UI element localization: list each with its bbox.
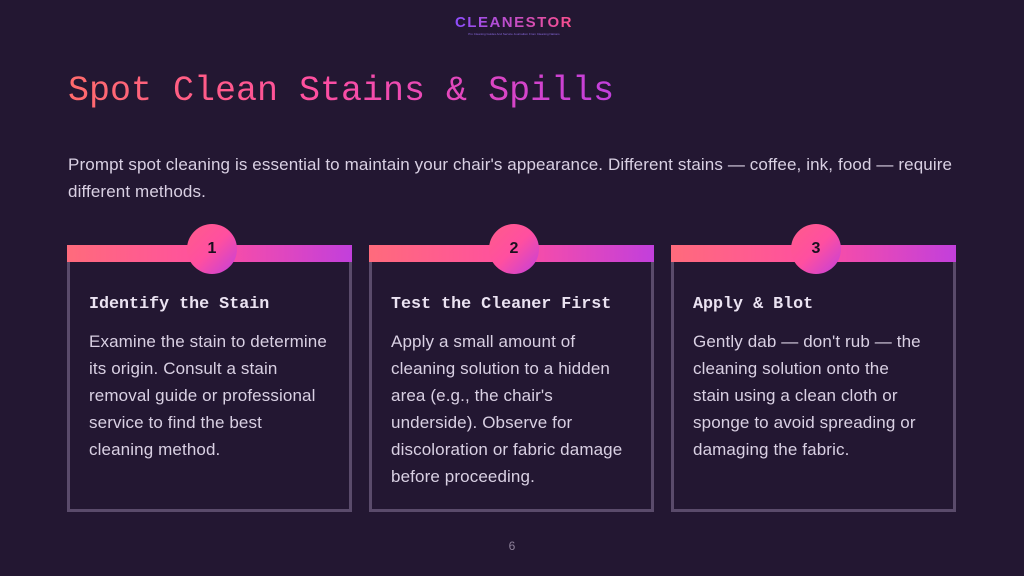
text 2: area (e.g., the chair's <box>391 386 553 405</box>
text 2: discoloration or fabric damage <box>391 440 622 459</box>
intro text <box>68 155 952 201</box>
text 1: removal guide or professional <box>89 386 316 405</box>
panel: step 3 <box>671 245 956 512</box>
text 1 <box>89 332 327 459</box>
badge 2: 2 <box>510 240 518 257</box>
title: Spot Clean Stains & Spills <box>68 71 614 111</box>
text 2: underside). Observe for <box>391 413 572 432</box>
text 3: damaging the fabric. <box>693 440 849 459</box>
text 3: cleaning solution onto the <box>693 359 889 378</box>
heading 1: Identify the Stain <box>89 295 269 314</box>
heading 2: Test the Cleaner First <box>391 295 611 314</box>
text 3: stain using a clean cloth or <box>693 386 898 405</box>
logo: CLEANESTOR <box>455 14 573 31</box>
text 2 <box>391 332 622 486</box>
badge 3 <box>791 224 841 274</box>
text 2: Apply a small amount of <box>391 332 575 351</box>
panel: step 2 <box>369 245 654 512</box>
text 3: sponge to avoid spreading or <box>693 413 916 432</box>
intro text: Prompt spot cleaning is essential to maintain your chair's appearance. Different stains — coffee, ink, food — require <box>68 155 952 174</box>
text 1: cleaning method. <box>89 440 220 459</box>
text 2: before proceeding. <box>391 467 535 486</box>
badge 2 <box>489 224 539 274</box>
badge 1 <box>187 224 237 274</box>
text 2: cleaning solution to a hidden <box>391 359 610 378</box>
page number: 6 <box>509 539 515 553</box>
badge 1: 1 <box>208 240 216 257</box>
text 3 <box>693 332 921 459</box>
heading 3: Apply & Blot <box>693 295 813 314</box>
panel: step 1 <box>67 245 352 512</box>
text 1: its origin. Consult a stain <box>89 359 277 378</box>
text 3: Gently dab — don't rub — the <box>693 332 921 351</box>
badge 3: 3 <box>812 240 820 257</box>
intro text: different methods. <box>68 182 206 201</box>
text 1: Examine the stain to determine <box>89 332 327 351</box>
text 1: service to find the best <box>89 413 262 432</box>
logo: Pro Cleaning Guides And Service Journalism From Cleaning Nations <box>468 32 560 36</box>
